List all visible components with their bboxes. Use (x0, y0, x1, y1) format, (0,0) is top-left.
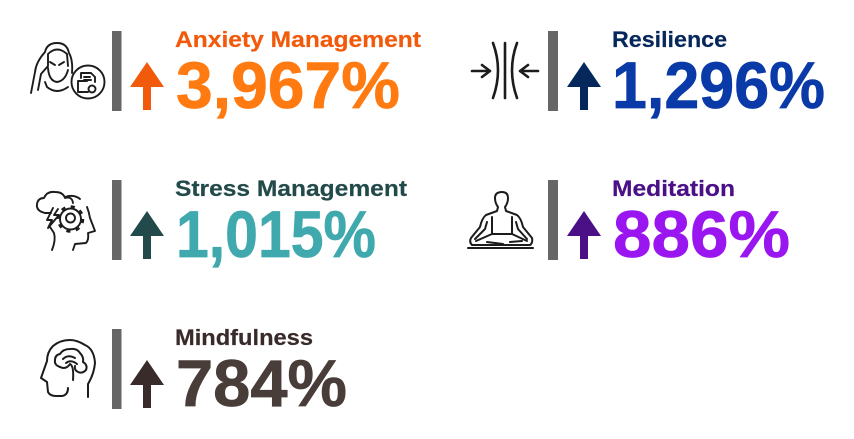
heading: Anxiety Management (175, 27, 422, 52)
value: 1,015% (176, 197, 376, 271)
icon: head with brain (41, 340, 95, 397)
divider bar (548, 31, 558, 111)
icon: meditating figure (468, 192, 533, 248)
icon: compression arrows (472, 43, 538, 98)
arrow up (130, 211, 164, 259)
heading: Mindfulness (175, 325, 313, 350)
divider bar (112, 31, 122, 111)
divider bar (548, 180, 558, 260)
heading: Stress Management (175, 176, 408, 201)
value: 3,967% (176, 48, 400, 122)
divider bar (112, 180, 122, 260)
panel: anxiety management (31, 27, 422, 122)
heading: Meditation (612, 176, 735, 201)
icon: head with storm cloud and gear (37, 192, 95, 250)
divider bar (112, 329, 122, 409)
arrow up (130, 62, 164, 110)
value: 784% (176, 346, 347, 420)
arrow up (567, 62, 601, 110)
value: 886% (613, 197, 790, 271)
arrow up (567, 211, 601, 259)
value: 1,296% (612, 48, 825, 122)
arrow up (130, 360, 164, 408)
panel: stress management (37, 176, 408, 271)
heading: Resilience (612, 27, 727, 52)
panel: mindfulness (41, 325, 347, 420)
panel: resilience (472, 27, 825, 122)
panel: meditation (468, 176, 790, 271)
icon: stressed woman with document (31, 43, 104, 98)
